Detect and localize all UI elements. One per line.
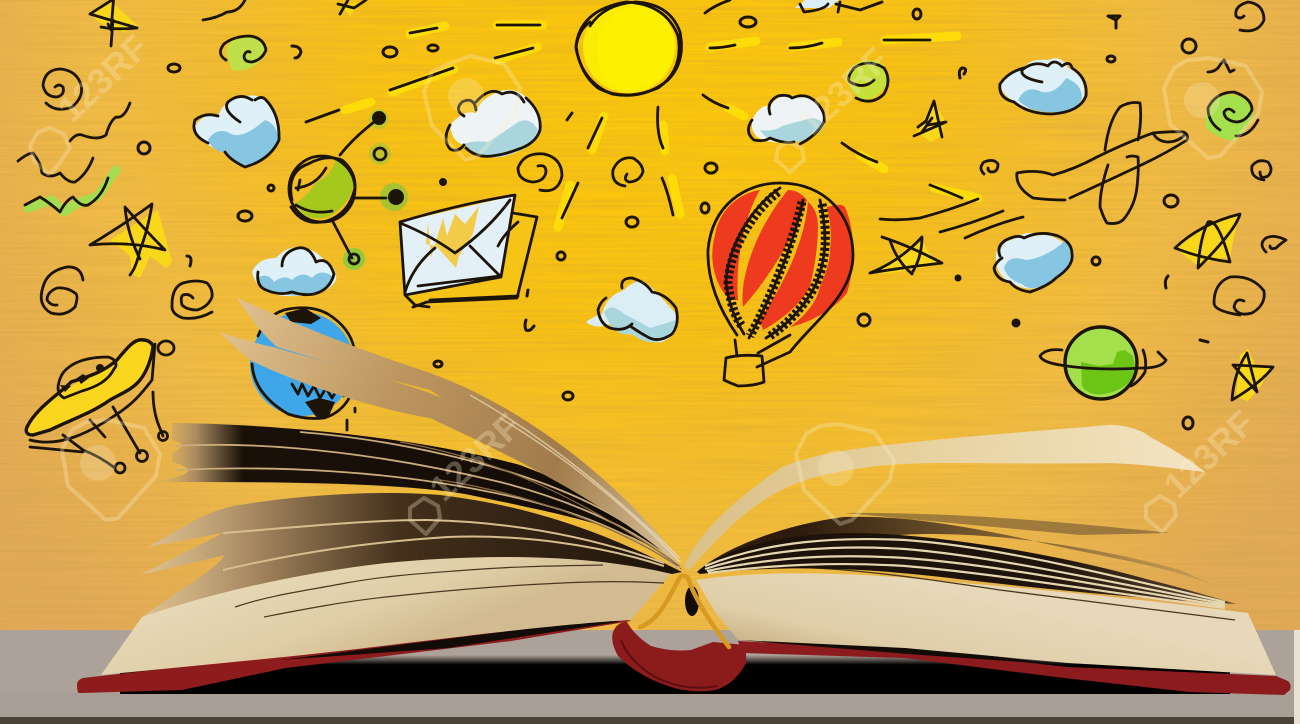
book: right flying page [684,425,1205,570]
table surface [0,630,1300,724]
doodle: ufo [26,340,174,473]
doodle: globe behind pages [250,308,355,430]
book: left flying pages [220,298,684,566]
watermarks: 123RF: 123RF [1155,402,1262,506]
book: left fanned dark pages [154,423,682,570]
book: right fanned pages [697,513,1236,608]
doodle: hot air balloon [708,183,853,386]
book: left cover [77,617,631,693]
doodle: small dots and rings [138,9,1208,429]
watermarks: 123RF: 123RF [421,405,528,509]
doodle: stars [90,0,1273,401]
watermarks: 123RF: 123RF [49,26,156,130]
book: under-book shadow [120,655,1230,694]
watermarks: 123RF: 123RF [789,39,896,143]
doodle: clouds [193,58,1086,342]
book: binding threads [640,576,729,647]
book: spine [612,622,746,691]
doodle: envelope [400,195,537,307]
doodle: flying streaks [880,199,1023,238]
doodle: squiggles [18,0,245,212]
book: left fanned lower pages [140,493,682,617]
doodle: satellite molecule [289,109,408,270]
doodle: airplane [1017,102,1188,224]
book: left page block [101,557,672,675]
doodle: swirls [41,2,1286,318]
book: right page block [696,567,1276,675]
doodle: planet with ring [1040,327,1166,399]
watermarks: 123RF [30,26,1262,534]
doodle: green swirl accents [28,36,1254,212]
book: right cover [738,640,1291,695]
doodle: sun and rays [306,0,978,227]
